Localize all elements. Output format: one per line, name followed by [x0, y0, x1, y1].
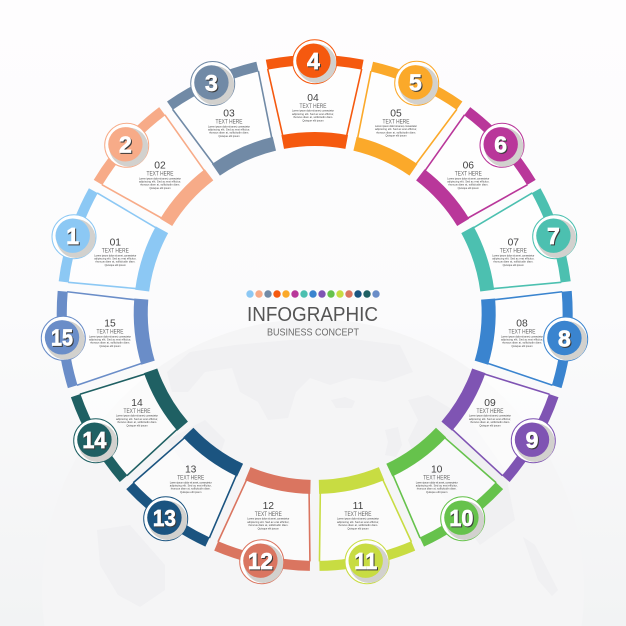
text block 08: Lorem ipsum dolor sit amet, consectetur — [501, 334, 543, 338]
frame 12 — [213, 463, 328, 576]
text block 01: TEXT HERE — [102, 249, 129, 255]
text block 02: TEXT HERE — [146, 172, 174, 178]
panel: segment 06 — [404, 104, 539, 240]
text block 10: Quisque elit ipsum — [426, 490, 447, 494]
badge 2: 2 — [119, 132, 132, 158]
text block 15 — [89, 319, 131, 348]
text block 02: adipiscing elit. Sed ac erat efficitur, — [139, 180, 181, 184]
text block 11: adipiscing elit. Sed ac erat efficitur, — [337, 520, 379, 524]
text block 07: Quisque elit ipsum — [503, 263, 524, 267]
text block 09: Lorem ipsum dolor sit amet, consectetur — [469, 414, 511, 418]
panel: segment 04 — [266, 40, 364, 149]
text block 10: rhoncus diam at, sollicitudin diam. — [417, 487, 457, 491]
text block 08: TEXT HERE — [508, 330, 536, 336]
text block 11 — [337, 501, 379, 530]
frame 09 — [432, 353, 563, 484]
text block 04: 04 — [307, 93, 319, 104]
text block 02: rhoncus diam at, sollicitudin diam. — [140, 183, 180, 187]
text block 01: rhoncus diam at, sollicitudin diam. — [95, 260, 136, 264]
panel: segment 08 — [473, 282, 588, 389]
text block 15: rhoncus diam at, sollicitudin diam. — [90, 341, 130, 345]
text block 15: Lorem ipsum dolor sit amet, consectetur — [89, 334, 131, 338]
text block 03: 03 — [223, 109, 235, 120]
text block 06: rhoncus diam at, sollicitudin diam. — [448, 183, 489, 187]
text block 13: adipiscing elit. Sed ac erat efficitur, — [170, 484, 212, 488]
frame 15 — [53, 282, 157, 389]
frame 05 — [337, 57, 464, 183]
text block 03: Quisque elit ipsum — [218, 134, 240, 138]
frame 02 — [90, 104, 225, 240]
text block 03: TEXT HERE — [216, 120, 242, 126]
badge 13: 13 — [153, 505, 176, 531]
frame 13 — [124, 417, 258, 550]
frame 14 — [67, 353, 197, 484]
text block 14: TEXT HERE — [124, 409, 150, 415]
text block 04: adipiscing elit. Sed ac erat efficitur, — [292, 112, 334, 116]
text block 10: 10 — [431, 465, 443, 476]
text block 09: 09 — [484, 398, 496, 409]
text block 03: Lorem ipsum dolor sit amet, consectetur — [208, 124, 250, 128]
frame 11 — [301, 463, 416, 576]
frame 06 — [404, 104, 539, 240]
text block 08: rhoncus diam at, sollicitudin diam. — [502, 341, 542, 345]
world globe backdrop — [42, 319, 584, 626]
text block 01: 01 — [110, 238, 121, 249]
panel: segment 03 — [165, 57, 293, 183]
panel: segment 10 — [372, 417, 506, 550]
text block 05: 05 — [390, 108, 402, 119]
frame 04 — [266, 55, 364, 149]
text block 01: adipiscing elit. Sed ac erat efficitur, — [94, 256, 137, 260]
text block 02: 02 — [154, 161, 166, 172]
text block 13 — [170, 465, 212, 494]
text block 08: adipiscing elit. Sed ac erat efficitur, — [501, 338, 543, 342]
text block 06: Quisque elit ipsum — [458, 186, 479, 190]
text block 13: rhoncus diam at, sollicitudin diam. — [171, 487, 211, 491]
text block 09: Quisque elit ipsum — [479, 423, 501, 427]
text block 02: Quisque elit ipsum — [149, 186, 171, 190]
badge 3: 3 — [205, 70, 218, 96]
text block 12: Quisque elit ipsum — [258, 526, 279, 530]
text block 15: Quisque elit ipsum — [99, 344, 121, 348]
text block 14: Lorem ipsum dolor sit amet, consectetur — [116, 414, 158, 418]
panel: segment 01 — [52, 187, 174, 309]
text block 09: adipiscing elit. Sed ac erat efficitur, — [469, 417, 511, 421]
text block 09 — [469, 398, 511, 427]
badge 14: 14 — [82, 427, 107, 453]
text block 12: TEXT HERE — [255, 512, 282, 518]
text block 08: 08 — [516, 319, 528, 330]
frame 03 — [165, 57, 293, 183]
text block 11: rhoncus diam at, sollicitudin diam. — [338, 523, 378, 527]
text block 06: TEXT HERE — [455, 172, 482, 178]
text block 03 — [208, 109, 250, 138]
text block 06 — [447, 161, 490, 190]
text block 04: Quisque elit ipsum — [302, 118, 324, 122]
frame 07 — [456, 187, 575, 309]
badge 6: 6 — [494, 132, 507, 158]
text block 07: TEXT HERE — [500, 249, 527, 255]
text block 08 — [501, 319, 543, 348]
text block 07: 07 — [508, 238, 519, 249]
text block 05: adipiscing elit. Sed ac erat efficitur, — [375, 127, 417, 131]
text block 15: adipiscing elit. Sed ac erat efficitur, — [89, 338, 131, 342]
panel: segment 14 — [67, 353, 197, 484]
text block 06: 06 — [463, 161, 474, 172]
panel: segment 02 — [90, 104, 225, 240]
panel: segment 15 — [41, 282, 157, 389]
text block 01 — [94, 238, 137, 267]
panel: segment 07 — [456, 187, 577, 309]
panel: segment 05 — [337, 57, 464, 183]
text block 04: TEXT HERE — [300, 104, 326, 110]
text block 05: Lorem ipsum dolor sit amet, consectetur — [375, 124, 417, 128]
text block 11: 11 — [353, 501, 364, 512]
text block 14: rhoncus diam at, sollicitudin diam. — [117, 420, 157, 424]
text block 15: 15 — [104, 319, 116, 330]
badge 5: 5 — [409, 70, 422, 96]
text block 12: Lorem ipsum dolor sit amet, consectetur — [247, 517, 289, 521]
text block 13: Quisque elit ipsum — [180, 490, 201, 494]
text block 02 — [139, 161, 181, 190]
subtitle: BUSINESS CONCEPT — [267, 326, 359, 338]
text block 06: Lorem ipsum dolor sit amet, consectetur — [447, 176, 489, 180]
text block 14: 14 — [131, 398, 143, 409]
text block 12 — [247, 501, 290, 530]
text block 05: Quisque elit ipsum — [385, 134, 407, 138]
text block 06: adipiscing elit. Sed ac erat efficitur, — [447, 180, 490, 184]
badge 4: 4 — [307, 48, 320, 74]
text block 13: 13 — [185, 465, 197, 476]
text block 13: TEXT HERE — [177, 476, 204, 482]
text block 01: Quisque elit ipsum — [105, 263, 126, 267]
text block 12: 12 — [263, 501, 274, 512]
text block 07 — [492, 238, 535, 267]
colour dot row — [246, 290, 380, 298]
badge 1: 1 — [66, 223, 79, 249]
text block 05: rhoncus diam at, sollicitudin diam. — [376, 130, 416, 134]
text block 10 — [416, 465, 458, 494]
text block 12: rhoncus diam at, sollicitudin diam. — [248, 523, 289, 527]
badge 8: 8 — [558, 325, 571, 351]
badge 9: 9 — [526, 427, 538, 453]
text block 04: Lorem ipsum dolor sit amet, consectetur — [292, 109, 334, 113]
badge 7: 7 — [547, 223, 560, 249]
frame 10 — [372, 417, 506, 550]
text block 07: rhoncus diam at, sollicitudin diam. — [493, 260, 534, 264]
text block 13: Lorem ipsum dolor sit amet, consectetur — [170, 480, 212, 484]
text block 08: Quisque elit ipsum — [511, 344, 533, 348]
text block 05 — [375, 108, 417, 138]
text block 09: TEXT HERE — [476, 409, 504, 415]
frame 01 — [54, 187, 174, 309]
text block 11: TEXT HERE — [344, 512, 372, 518]
text block 14: Quisque elit ipsum — [126, 423, 148, 427]
badge 10: 10 — [449, 505, 473, 531]
frame 08 — [473, 282, 576, 389]
text block 11: Lorem ipsum dolor sit amet, consectetur — [337, 517, 379, 521]
text block 07: adipiscing elit. Sed ac erat efficitur, — [492, 256, 535, 260]
text block 05: TEXT HERE — [382, 119, 410, 125]
text block 12: adipiscing elit. Sed ac erat efficitur, — [247, 520, 290, 524]
text block 01: Lorem ipsum dolor sit amet, consectetur — [94, 253, 136, 257]
text block 02: Lorem ipsum dolor sit amet, consectetur — [139, 176, 181, 180]
text block 10: adipiscing elit. Sed ac erat efficitur, — [416, 484, 458, 488]
text block 07: Lorem ipsum dolor sit amet, consectetur — [492, 253, 534, 257]
text block 10: Lorem ipsum dolor sit amet, consectetur — [416, 480, 458, 484]
text block 03: adipiscing elit. Sed ac erat efficitur, — [208, 128, 250, 132]
panel: segment 12 — [213, 463, 328, 584]
panel: segment 13 — [124, 417, 258, 550]
badge 11: 11 — [354, 548, 377, 574]
text block 04 — [292, 93, 334, 122]
text block 09: rhoncus diam at, sollicitudin diam. — [470, 420, 510, 424]
badge 12: 12 — [248, 548, 273, 574]
title: INFOGRAPHIC — [247, 304, 378, 326]
text block 15: TEXT HERE — [96, 330, 124, 336]
panel: segment 11 — [301, 463, 416, 584]
badge 15: 15 — [51, 325, 73, 351]
text block 10: TEXT HERE — [423, 476, 450, 482]
panel: segment 09 — [432, 353, 563, 484]
text block 03: rhoncus diam at, sollicitudin diam. — [209, 131, 249, 135]
text block 14 — [116, 398, 158, 427]
text block 11: Quisque elit ipsum — [347, 526, 369, 530]
text block 04: rhoncus diam at, sollicitudin diam. — [293, 115, 333, 119]
text block 14: adipiscing elit. Sed ac erat efficitur, — [116, 417, 158, 421]
